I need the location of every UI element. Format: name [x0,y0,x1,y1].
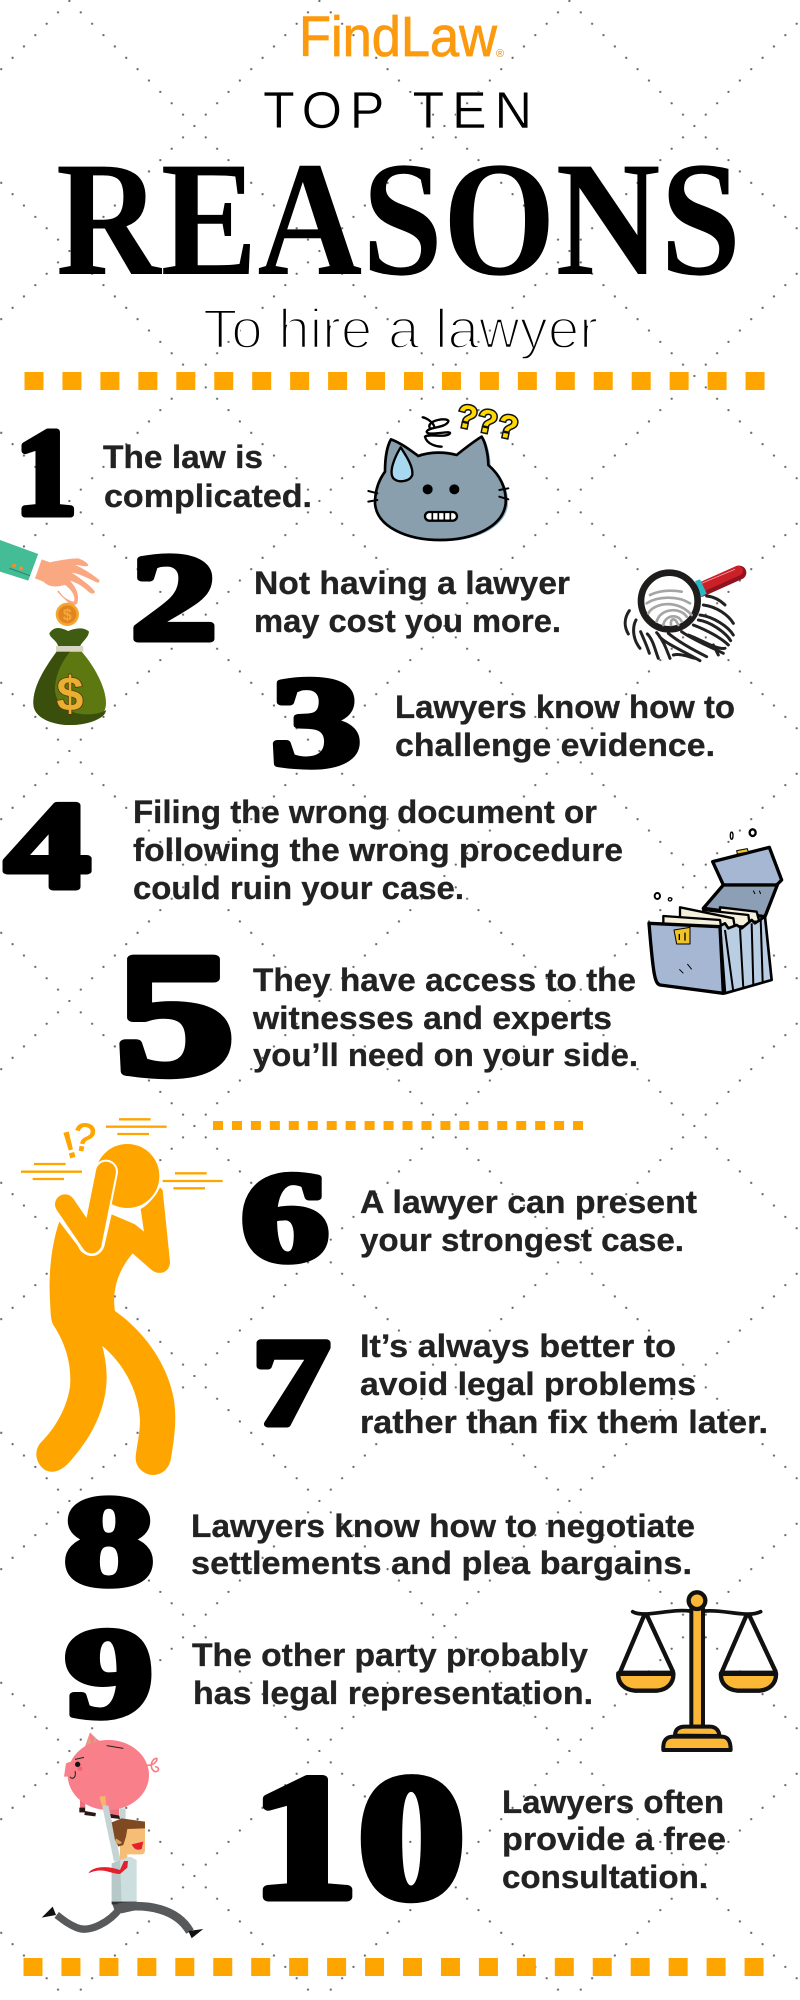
number 10: 10 [251,1738,465,1936]
number 2: 2 [131,529,217,666]
text: reason 5: you’ll need on your side. [253,1037,638,1073]
icon: file folder box [649,829,782,993]
panel: reason 2 [131,529,570,666]
heading: TOP TEN: TOP TEN [263,82,532,140]
number 8: 8 [64,1470,154,1612]
text: reason 10: Lawyers often [502,1784,724,1820]
text: reason 4 [133,794,623,906]
text: reason 9: has legal representation. [193,1675,593,1711]
text: reason 7: It’s always better to [360,1328,676,1364]
text: reason 6: A lawyer can present [360,1184,697,1220]
panel: reason 10 [251,1738,726,1936]
icon: hand dropping coin into money bag: $ [57,668,84,722]
icon: hand dropping coin into money bag: $ [63,607,72,624]
icon: stressed orange figure: ? [69,1114,99,1161]
logo: FindLaw: ® [496,48,504,60]
text: reason 1: The law is [103,439,263,475]
text: reason 3: challenge evidence. [395,727,715,763]
text: reason 1 [103,439,312,514]
text: reason 8: settlements and plea bargains. [191,1545,692,1581]
icon: stressed orange figure [21,1114,223,1475]
panel: reason 3 [271,651,735,793]
text: reason 8 [191,1508,695,1581]
text: reason 4: following the wrong procedure [133,832,623,868]
panel: reason 9 [65,1602,593,1744]
panel: reason 5 [116,918,638,1111]
icon: confused cat: ? [494,406,522,447]
text: reason 7: avoid legal problems [360,1366,696,1402]
number 6: 6 [241,1146,329,1288]
panel: reason 6 [241,1146,697,1288]
text: reason 1: complicated. [104,478,312,514]
text: reason 4: could ruin your case. [133,870,464,906]
icon: man running with piggy bank [42,1732,203,1938]
panel: reason 8 [64,1470,695,1612]
text: reason 5 [252,962,638,1073]
logo: FindLaw: FindLaw [299,5,498,69]
text: reason 6 [360,1184,697,1258]
number 9: 9 [65,1602,153,1744]
number 1: 1 [15,404,77,541]
panel: reason 7 [252,1314,768,1451]
number 7: 7 [252,1314,330,1451]
number 4: 4 [5,777,90,914]
number 5: 5 [116,918,234,1111]
text: reason 4: Filing the wrong document or [133,794,597,830]
text: reason 2: Not having a lawyer [254,565,570,601]
text: reason 8: Lawyers know how to negotiate [191,1508,695,1544]
icon: scales of justice [618,1592,776,1750]
icon: confused cat: ? [474,401,501,441]
text: reason 3: Lawyers know how to [395,689,735,725]
text: reason 5: They have access to the [253,962,636,998]
icon: magnifying glass on fingerprint [625,569,739,661]
icon: stressed orange figure: ! [58,1123,81,1168]
text: reason 7: rather than fix them later. [360,1404,768,1440]
number 3: 3 [271,651,361,793]
text: reason 2: may cost you more. [254,603,561,639]
icon: hand dropping coin into money bag [0,540,106,725]
icon: confused cat: ? [454,396,481,437]
text: reason 9 [192,1637,593,1711]
text: reason 7 [360,1328,768,1440]
text: reason 10: provide a free [502,1821,726,1857]
text: reason 10: consultation. [502,1859,708,1895]
icon: confused cat [368,396,522,541]
text: reason 6: your strongest case. [360,1222,684,1258]
text: reason 5: witnesses and experts [252,1000,612,1036]
subheading: To hire a lawyer: To hire a lawyer [203,297,598,360]
text: reason 3 [395,689,735,763]
panel: reason 4 [5,777,623,914]
text: reason 10 [502,1784,726,1895]
text: reason 9: The other party probably [192,1637,588,1673]
text: reason 2 [254,565,570,639]
panel: reason 1 [15,404,312,541]
